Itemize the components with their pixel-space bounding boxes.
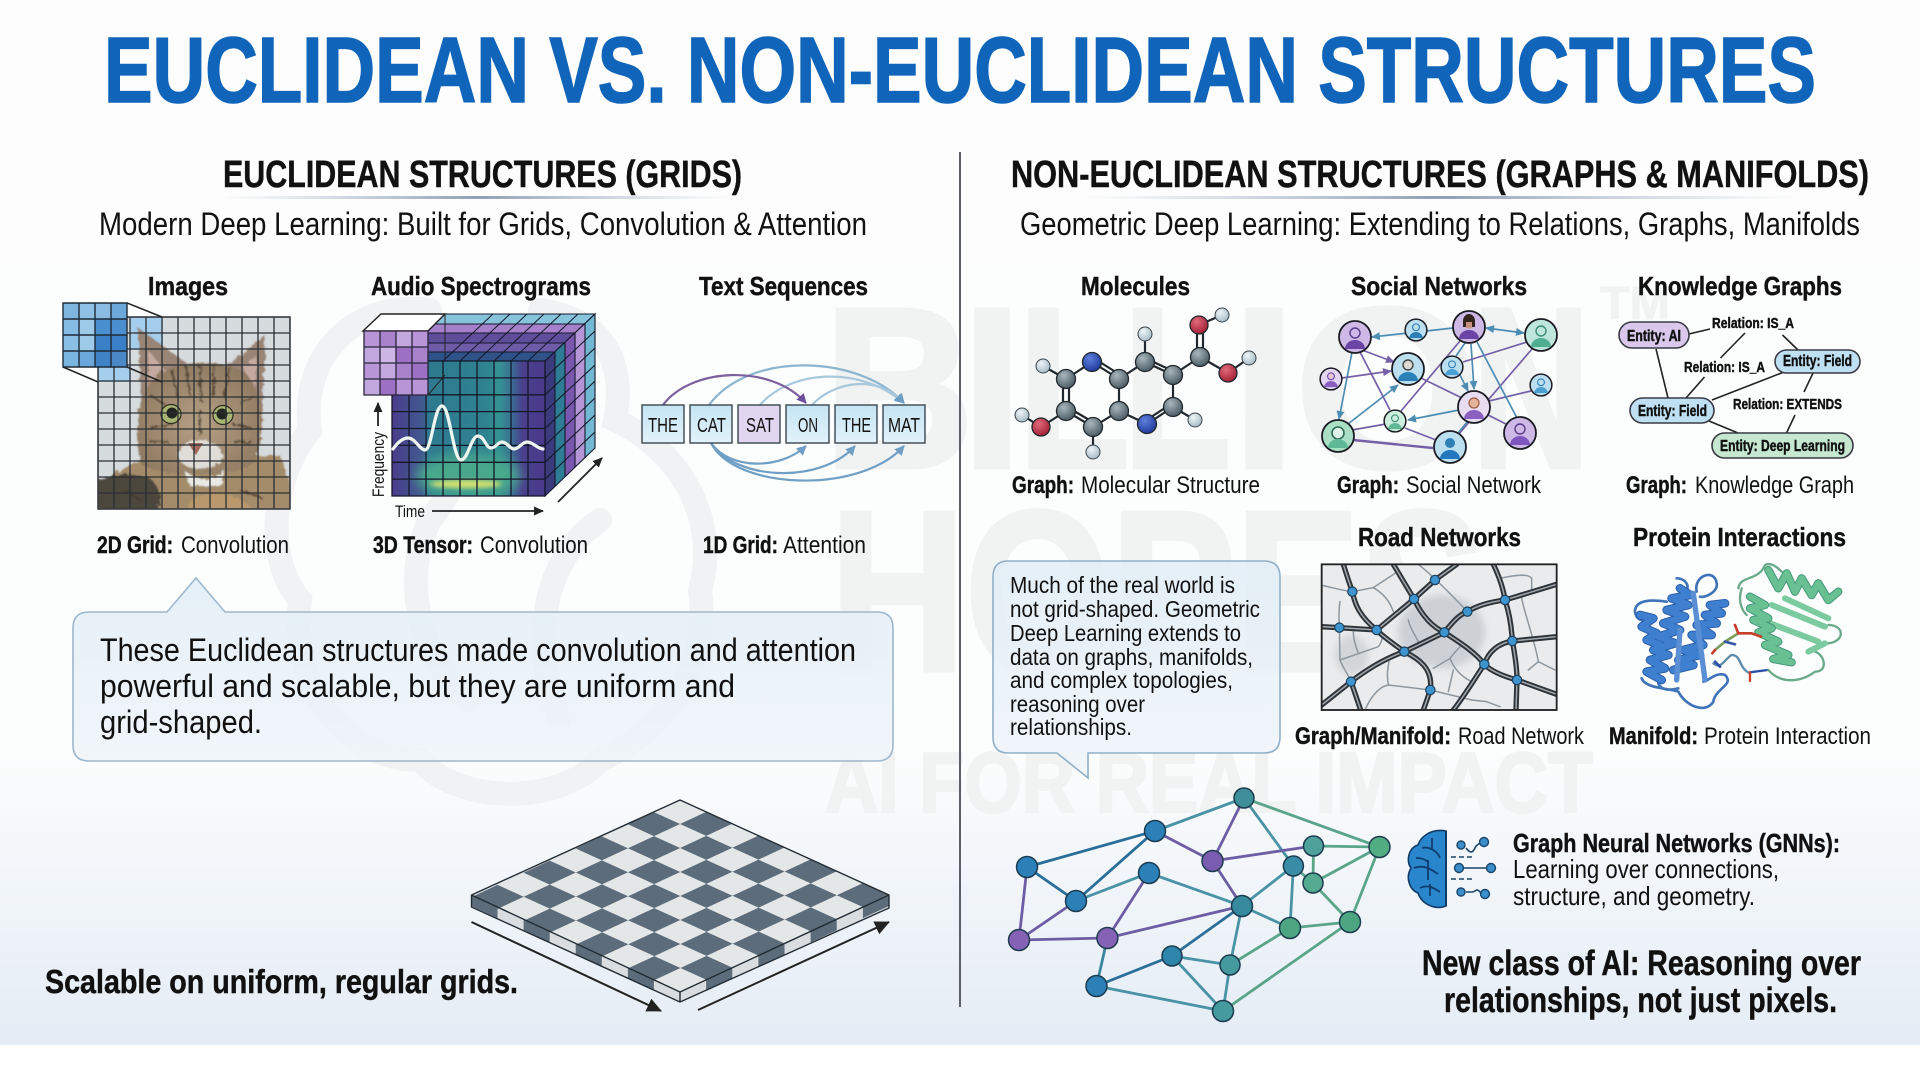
caption: 1D grid: Attention [783,532,866,559]
watermark: TM [1600,277,1670,329]
social network diagram [1320,311,1557,463]
heading: euclidean: EUCLIDEAN STRUCTURES (GRIDS) [223,154,742,196]
axis: depth arrow [558,458,602,502]
label: text sequences: Text Sequences [699,271,868,301]
axis: time: Time [395,502,425,521]
caption: road network [1295,723,1585,750]
text: graph neural networks: Graph Neural Networks (GNNs): [1513,828,1840,858]
knowledge graph diagram: Entity: Field [1783,353,1852,370]
caption: protein interaction: Protein Interaction [1704,723,1871,750]
token sequence: SAT [746,415,774,437]
callout: non-euclidean: relationships. [1010,714,1132,740]
caption: social network: Social Network [1406,472,1542,499]
callout: euclidean: grid-shaped. [100,704,262,740]
token sequence [642,405,925,443]
caption: social network: Graph: [1337,472,1399,499]
arrow: board width [472,922,661,1011]
statement: scalable: Scalable on uniform, regular grids. [45,963,518,1000]
caption: social network [1337,472,1542,499]
caption: 1D grid: 1D Grid: [703,532,778,559]
callout: euclidean: powerful and scalable, but they are uniform and [100,668,735,704]
text: graph neural networks: structure, and geometry. [1513,881,1755,911]
knowledge graph diagram: Entity: AI [1627,328,1681,345]
caption: 3D tensor: 3D Tensor: [373,532,473,559]
callout: euclidean [73,578,893,761]
panel: euclidean structures [45,154,925,1011]
spectrogram tensor [392,314,595,498]
watermark: AI FOR REAL IMPACT [825,736,1593,831]
watermark [277,262,1670,831]
statement: new class of AI [1422,944,1861,1020]
callout: non-euclidean: and complex topologies, [1010,667,1233,693]
subtitle: euclidean: Modern Deep Learning: Built for Grids, Convolution & Attention [99,206,867,242]
caption: 2D grid [97,532,289,559]
knowledge graph diagram: Entity: Deep Learning [1720,438,1845,455]
label: audio spectrograms: Audio Spectrograms [371,271,591,301]
watermark: I [1233,262,1295,516]
watermark: HOPES [830,465,1485,719]
axis: frequency: Frequency [369,432,388,497]
caption: knowledge graph: Knowledge Graph [1695,472,1854,499]
label: protein interactions: Protein Interactions [1633,522,1846,552]
checkerboard [472,800,889,1002]
callout: non-euclidean: data on graphs, manifolds, [1010,644,1253,670]
molecule diagram [1015,308,1256,459]
label: molecules: Molecules [1081,271,1190,301]
token sequence: MAT [888,415,920,437]
token sequence: THE [842,415,871,437]
text: graph neural networks: Learning over connections, [1513,854,1779,884]
watermark: L [1123,262,1231,516]
text: graph neural networks [1513,828,1840,911]
watermark: O [1295,262,1480,516]
caption: 2D grid: Convolution [181,532,289,559]
protein ribbon diagram [1635,564,1841,708]
caption: molecular structure: Graph: [1012,472,1074,499]
caption: road network: Road Network [1458,723,1585,750]
caption: 2D grid: 2D Grid: [97,532,173,559]
statement: new class of AI: relationships, not just pixels. [1444,981,1837,1020]
token sequence: ON [798,415,818,437]
knowledge graph diagram: Relation: EXTENDS [1733,396,1842,413]
road network diagram [1322,564,1557,710]
panel: non-euclidean structures [993,154,1871,1022]
callout: non-euclidean: not grid-shaped. Geometric [1010,596,1260,622]
knowledge graph diagram: Relation: IS_A [1684,359,1765,376]
watermark: B [824,262,974,516]
callout: non-euclidean [993,561,1280,778]
caption: protein interaction [1609,723,1871,750]
label: road networks: Road Networks [1358,522,1521,552]
watermark: N [1472,262,1590,516]
label: images: Images [148,271,228,301]
heading underline left [220,196,735,199]
caption: protein interaction: Manifold: [1609,723,1698,750]
label: social networks: Social Networks [1351,271,1527,301]
convolution kernel [63,303,162,382]
icon: brain circuit [1408,830,1496,907]
watermark: I [962,262,1022,516]
label: knowledge graphs: Knowledge Graphs [1638,271,1842,301]
token sequence: CAT [697,415,726,437]
caption: 3D tensor [373,532,588,559]
attention arcs [663,365,904,481]
arrow: board depth [698,922,889,1010]
image grid with cat [96,317,292,512]
callout: euclidean: These Euclidean structures made convolution and attention [100,632,856,668]
watermark: L [1018,262,1130,516]
callout: non-euclidean: Deep Learning extends to [1010,620,1241,646]
heading underline right [1080,196,1800,199]
purple kernel [363,314,445,395]
knowledge graph diagram: Entity: Field [1638,403,1707,420]
caption: knowledge graph: Graph: [1626,472,1687,499]
knowledge graph diagram [1619,315,1860,458]
callout: non-euclidean: Much of the real world is [1010,572,1235,598]
caption: 1D grid [703,532,866,559]
caption: knowledge graph [1626,472,1854,499]
knowledge graph diagram: Relation: IS_A [1712,315,1794,332]
caption: 3D tensor: Convolution [480,532,588,559]
graph neural network diagram [1008,788,1390,1022]
caption: molecular structure: Molecular Structure [1081,472,1260,499]
token sequence: THE [648,415,678,437]
caption: molecular structure [1012,472,1260,499]
caption: road network: Graph/Manifold: [1295,723,1451,750]
callout: non-euclidean: reasoning over [1010,691,1145,717]
center divider [959,152,961,1007]
